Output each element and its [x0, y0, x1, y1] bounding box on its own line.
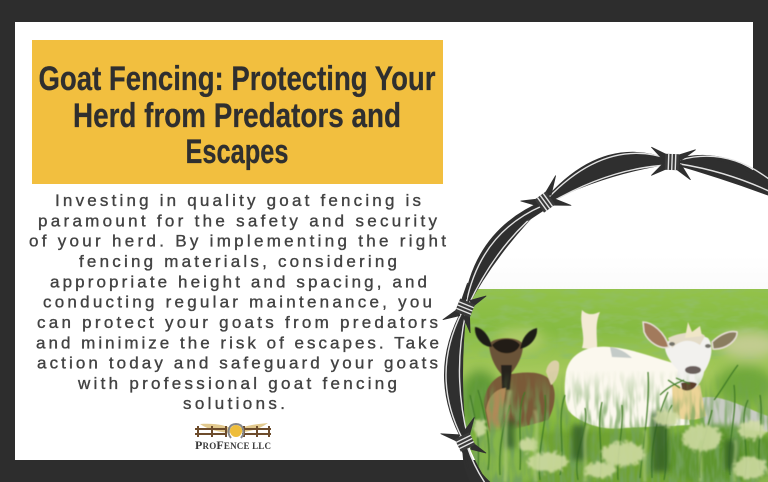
body — [565, 347, 690, 429]
icon: horns — [200, 423, 268, 433]
grass texture — [460, 328, 768, 430]
logo wordmark: PROFENCE LLC — [195, 438, 271, 452]
soft out-of-focus blades — [505, 390, 736, 482]
body paragraph: paramount for the safety and security — [38, 211, 437, 230]
back leg shading — [700, 397, 768, 432]
body paragraph: can protect your goats from predators — [37, 313, 438, 332]
body paragraph: Investing in quality goat fencing is — [55, 191, 421, 210]
photo: goats in a meadow — [463, 180, 768, 482]
title: Herd from Predators and — [73, 97, 401, 135]
barb: top — [650, 147, 695, 180]
barb: upper left — [516, 176, 575, 231]
body paragraph: fencing materials, considering — [79, 252, 397, 271]
barb: lower left — [441, 417, 493, 472]
ears — [475, 327, 492, 347]
body paragraph: with professional goat fencing — [77, 374, 397, 393]
barbed wire frame — [441, 147, 768, 482]
body paragraph: action today and safeguard your goats — [37, 354, 438, 373]
goat: brown kid — [475, 327, 559, 436]
body paragraph: conducting regular maintenance, you — [43, 293, 432, 312]
logo: ProFence LLC — [195, 423, 271, 452]
body paragraph: of your herd. By implementing the right — [29, 232, 446, 251]
body paragraph: and minimize the risk of escapes. Take — [36, 333, 439, 352]
icon: sun — [230, 425, 242, 437]
sky — [753, 180, 768, 289]
wire segments — [446, 154, 768, 482]
chest — [672, 385, 706, 420]
body paragraph — [29, 191, 446, 413]
tall grass — [470, 365, 761, 480]
ears — [643, 322, 669, 348]
foreground grass mass — [450, 425, 768, 482]
dark grass shadows — [505, 412, 737, 472]
meadow — [440, 289, 768, 482]
tail — [581, 310, 600, 350]
title: Goat Fencing: Protecting Your — [38, 60, 436, 98]
eyes, nose, mouth — [669, 342, 675, 346]
pale flowers — [474, 410, 767, 479]
body paragraph: solutions. — [183, 394, 285, 413]
title — [38, 60, 436, 171]
grass mottling — [440, 289, 768, 359]
title: Escapes — [186, 133, 288, 171]
barb: left — [442, 280, 488, 333]
goat: white adult — [565, 310, 768, 432]
body paragraph: appropriate height and spacing, and — [50, 272, 427, 291]
icon: fence — [195, 426, 271, 437]
foreground grass blades — [440, 370, 768, 482]
title banner — [32, 40, 443, 184]
white strands — [446, 153, 768, 482]
icon: horseshoe — [229, 424, 243, 438]
head — [665, 334, 711, 390]
